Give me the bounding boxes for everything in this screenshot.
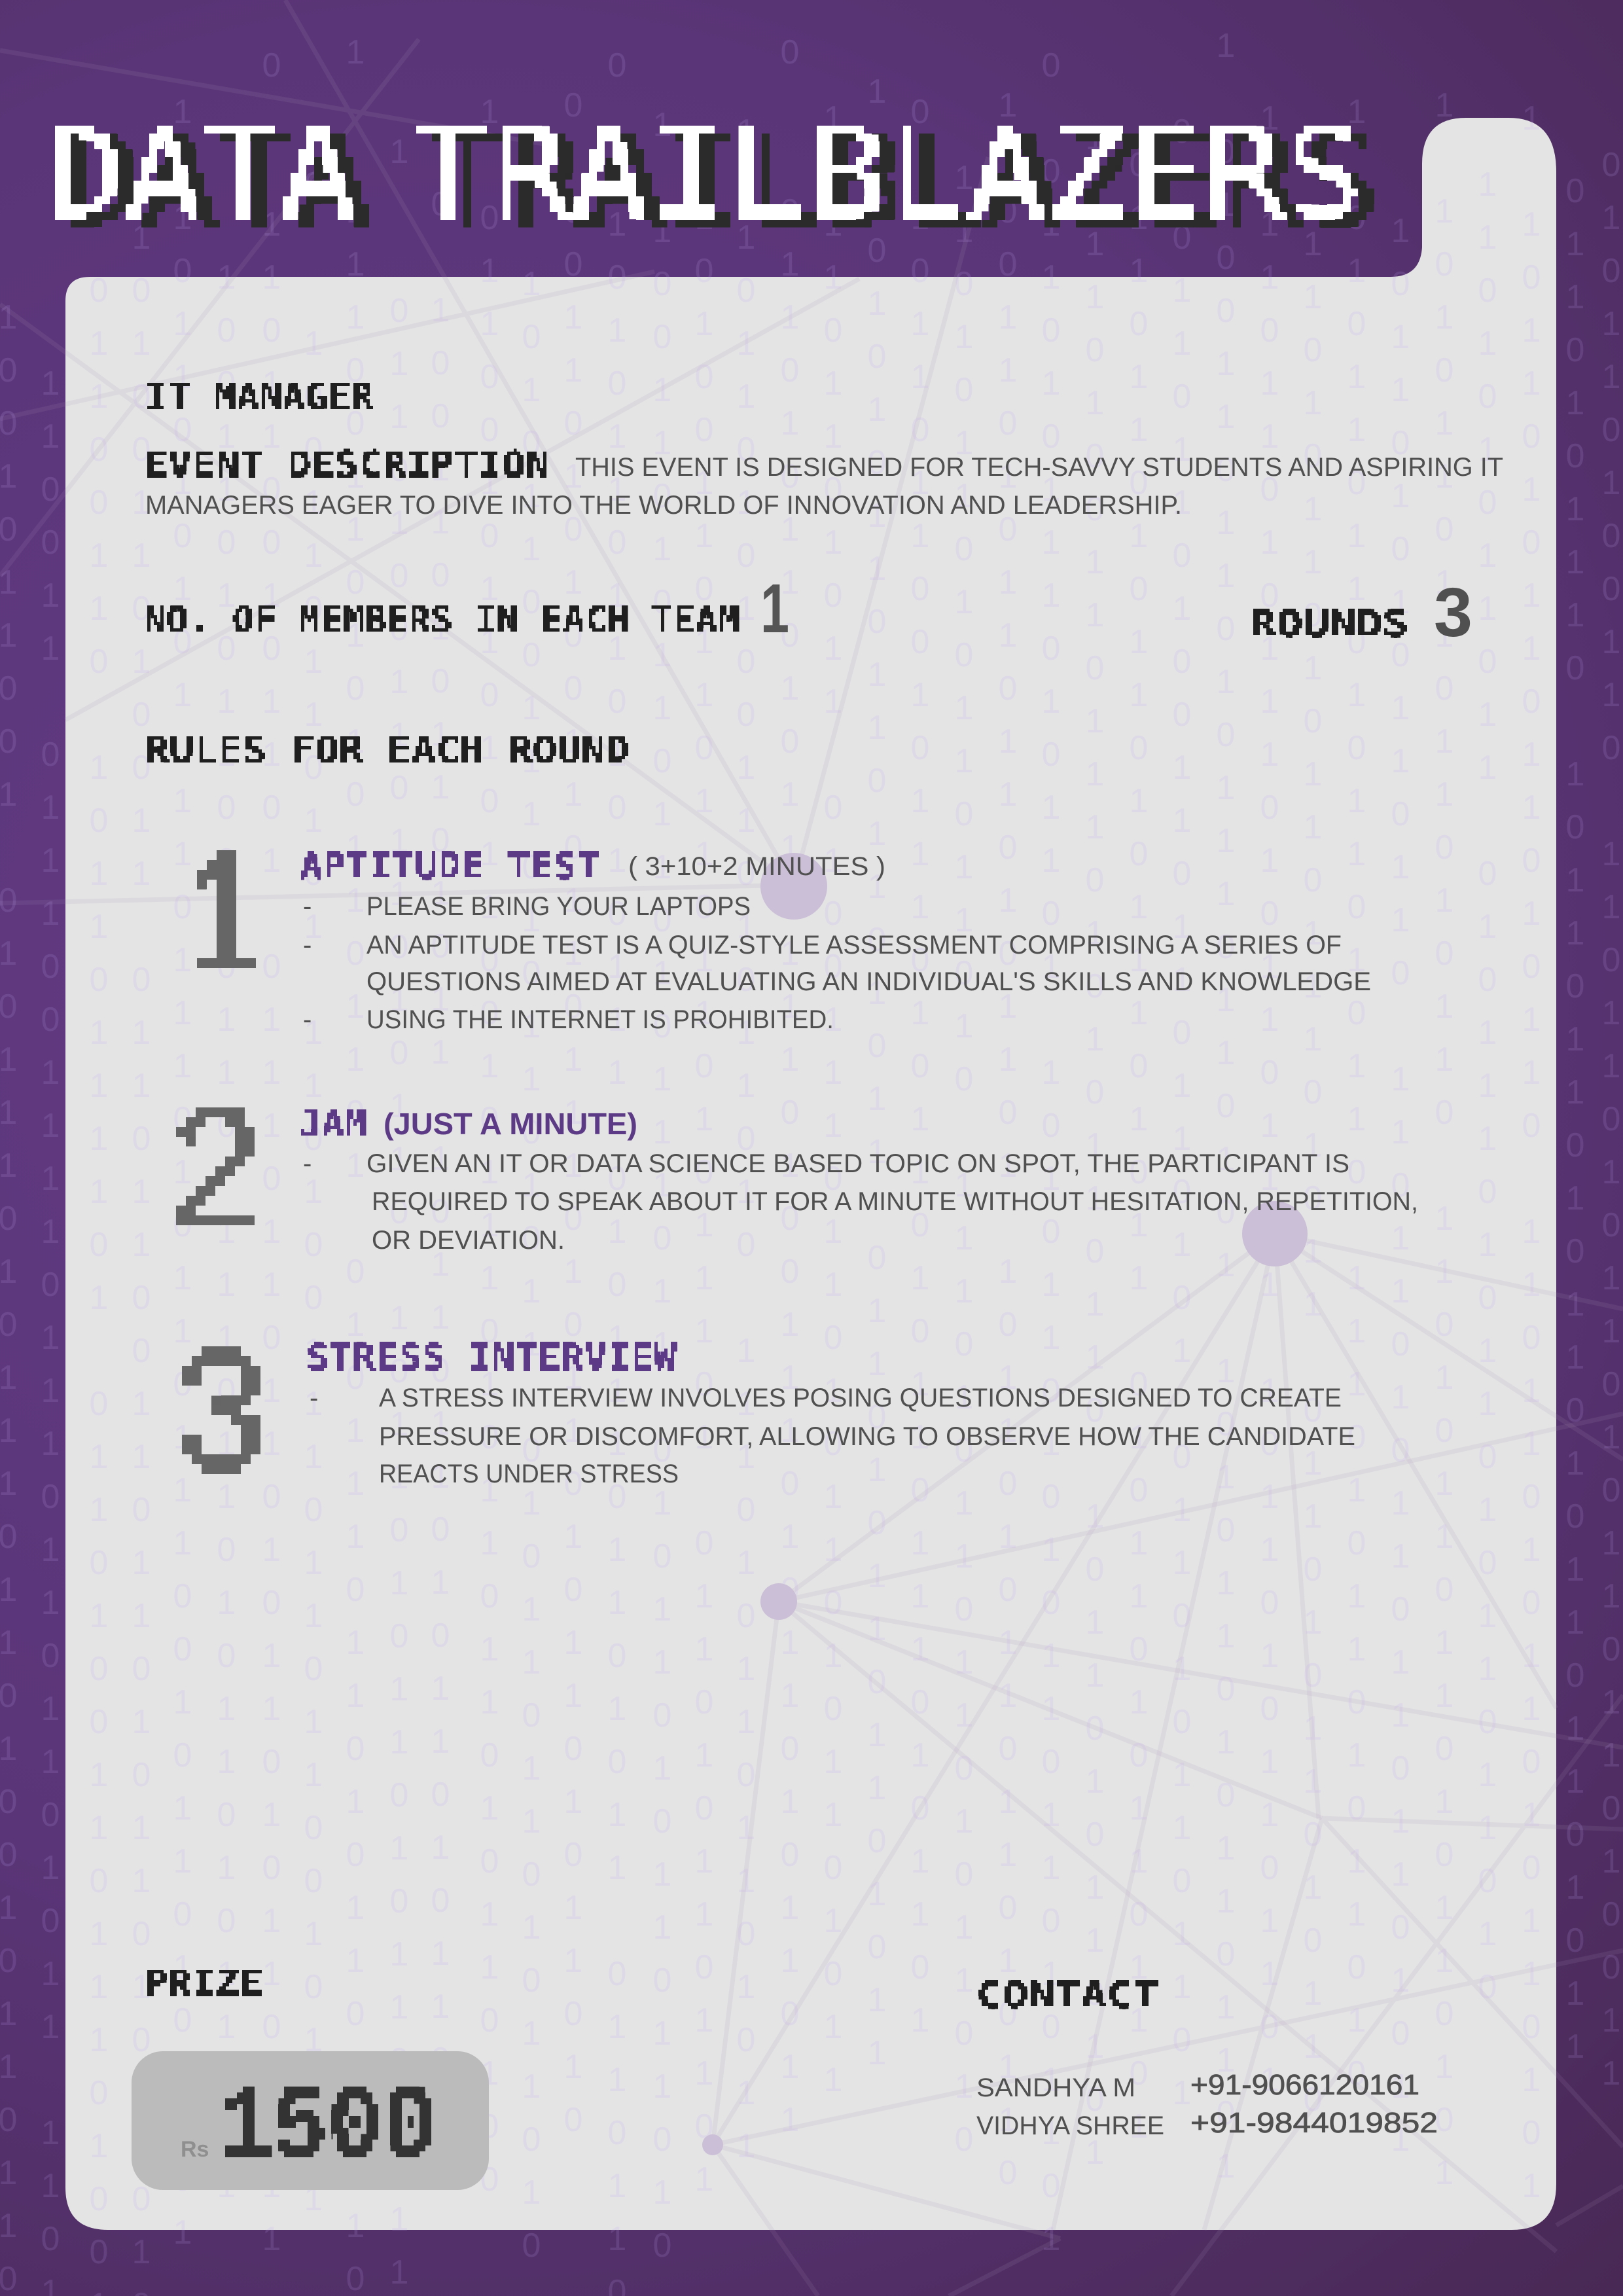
binary digits pattern: 1 0101101101011010110 1110101101011010 bbox=[1338, 0, 1376, 2108]
round 3 bbox=[306, 1336, 1355, 1488]
contact: +91-9066120161 bbox=[1190, 2069, 1419, 2101]
binary digits pattern: 110101101011011010 1110101101101011010 bbox=[945, 0, 983, 2174]
event description: MANAGERS EAGER TO DIVE INTO THE WORLD OF INNOVATION AND LEADERSHIP. bbox=[145, 491, 1182, 520]
team members bbox=[144, 570, 789, 647]
binary digits pattern: 0 100110101101011 10110110101101011010 bbox=[421, 26, 459, 2200]
binary digits pattern: 0 0110110100110110110101 0110101101101 bbox=[1163, 7, 1201, 2127]
prize box bbox=[132, 2051, 489, 2190]
binary digits pattern: 1 01100101101011001011101011011010110100 bbox=[471, 0, 508, 2214]
team members: NO. OF MEMBERS IN EACH TEAM bbox=[144, 599, 740, 641]
contact bbox=[976, 1974, 1438, 2140]
title: TRAILBLAZERS bbox=[411, 101, 1363, 246]
title bbox=[47, 101, 1380, 253]
binary digits pattern: 0 10110110010111010110101101110101101 bbox=[901, 0, 939, 2054]
title: DATA bbox=[64, 109, 373, 253]
rounds: ROUNDS bbox=[1250, 603, 1409, 645]
binary digits pattern: 1 10110101001101011010 1110101101101011 bbox=[727, 7, 765, 2180]
round 1: - bbox=[303, 1005, 312, 1034]
binary digits pattern: 0 1101100101101 0111011011010110101101011 bbox=[253, 0, 291, 2273]
binary digits pattern: 10011010110010110 1110110101101011011 bbox=[207, 0, 245, 2220]
binary digits pattern: 1010011010011 01101100110110101101011010 bbox=[122, 7, 160, 2296]
round 2: JAM bbox=[300, 1102, 366, 1145]
contact: CONTACT bbox=[976, 1974, 1159, 2017]
binary digits pattern: 1 011010011011010110 1011010110101101011 bbox=[380, 0, 418, 2296]
binary digits pattern: 0 100110110101 11010011101101100101101 bbox=[294, 7, 332, 2233]
binary digits pattern: 0 0110101110101101 10101101010110110101101 bbox=[1032, 0, 1070, 2273]
binary digits pattern: 1 101011001110101101011 0101101101011010 bbox=[512, 0, 550, 2280]
prize box: 1500 bbox=[219, 2068, 437, 2190]
contact: SANDHYA M bbox=[976, 2073, 1135, 2102]
binary digits pattern: 1 110110101110101101101 10110101101101 bbox=[1251, 0, 1289, 2114]
binary digits pattern: 1 1010101101101101011 0110101101101011 bbox=[858, 20, 896, 2087]
binary digits pattern: 110101101011011101011 01101011010110 bbox=[1294, 13, 1332, 2134]
binary digits pattern: 1 0100110110101110110101 1010110101101101 bbox=[1207, 0, 1245, 2200]
rounds: 3 bbox=[1434, 574, 1472, 651]
binary digits pattern: 0 110101101101010111 01011101101011 0110110 bbox=[598, 0, 636, 2296]
round 2: OR DEVIATION. bbox=[372, 1226, 565, 1255]
title: TRAILBLAZERS bbox=[428, 109, 1380, 253]
round 1: QUESTIONS AIMED AT EVALUATING AN INDIVIDUAL'S SKILLS AND KNOWLEDGE bbox=[366, 967, 1371, 996]
binary digits pattern: 1101001101101101101011101 0110101101101 bbox=[685, 0, 723, 2214]
round 1 number: 1 bbox=[186, 821, 258, 1022]
round 2: (JUST A MINUTE) bbox=[383, 1107, 637, 1141]
round 2: - bbox=[303, 1149, 312, 1178]
binary digits pattern: 0110110101101011101011 010110101101101 bbox=[1120, 0, 1158, 2161]
round 2 bbox=[300, 1102, 1418, 1255]
title: DATA bbox=[47, 101, 356, 246]
binary digits pattern: 0110101110 1011011010110101101101011 bbox=[1556, 13, 1594, 2081]
binary digits pattern: 110101011011 0101110101101011011010 bbox=[1469, 7, 1507, 2021]
event description: EVENT DESCRIPTION bbox=[144, 444, 550, 486]
round 3: A STRESS INTERVIEW INVOLVES POSING QUESTIONS DESIGNED TO CREATE bbox=[379, 1384, 1342, 1412]
round 2: GIVEN AN IT OR DATA SCIENCE BASED TOPIC ON SPOT, THE PARTICIPANT IS bbox=[366, 1149, 1349, 1178]
team members: 1 bbox=[760, 570, 789, 647]
round 3: - bbox=[310, 1384, 318, 1412]
prize box: Rs bbox=[181, 2137, 209, 2162]
binary digits pattern: 1 1001101011011010111011 0101101011011010 bbox=[643, 0, 681, 2280]
round 3: STRESS INTERVIEW bbox=[306, 1336, 677, 1379]
heading: rules: RULES FOR EACH ROUND bbox=[145, 729, 630, 772]
round 1: PLEASE BRING YOUR LAPTOPS bbox=[366, 892, 751, 921]
round 1: - bbox=[303, 931, 312, 960]
round 2 number: 2 bbox=[166, 1079, 264, 1279]
binary digits pattern: 1 101101011011010110 1101101011010110101 bbox=[1512, 0, 1550, 2220]
contact: +91-9844019852 bbox=[1190, 2107, 1438, 2139]
rounds bbox=[1250, 574, 1472, 651]
round 2: REQUIRED TO SPEAK ABOUT IT FOR A MINUTE WITHOUT HESITATION, REPETITION, bbox=[372, 1187, 1418, 1216]
binary digits pattern: 1 101011011011010110 1101011011010110101 bbox=[1425, 0, 1463, 2207]
binary digits pattern: 1 1101101011 0100111011010110101101011 bbox=[814, 0, 852, 2114]
round 1: USING THE INTERNET IS PROHIBITED. bbox=[366, 1005, 834, 1034]
network nodes bbox=[702, 853, 1308, 2155]
heading: IT Manager: IT MANAGER bbox=[145, 376, 374, 418]
round 3 number: 3 bbox=[172, 1321, 270, 1522]
round 1: - bbox=[303, 892, 312, 921]
round 1: APTITUDE TEST bbox=[300, 845, 599, 888]
event description bbox=[144, 444, 1503, 520]
round 1 bbox=[300, 845, 1371, 1034]
event description: THIS EVENT IS DESIGNED FOR TECH-SAVVY STUDENTS AND ASPIRING IT bbox=[575, 453, 1503, 482]
round 1: AN APTITUDE TEST IS A QUIZ-STYLE ASSESSMENT COMPRISING A SERIES OF bbox=[366, 931, 1342, 960]
binary digits pattern: 1 11010011011101010110110 1011010110101 bbox=[1076, 13, 1114, 2187]
binary digits pattern: 101101010110110 110110101101101101011 bbox=[1382, 0, 1419, 2174]
contact: VIDHYA SHREE bbox=[976, 2111, 1164, 2140]
binary digits pattern: 1 0011010110110101101 101101011011010110 bbox=[989, 0, 1027, 2207]
heading: prize: PRIZE bbox=[144, 1962, 263, 2005]
round 3: REACTS UNDER STRESS bbox=[379, 1460, 679, 1488]
round 1: ( 3+10+2 MINUTES ) bbox=[628, 852, 885, 881]
binary digits pattern: 0 0011010100110110111010110101101011010 bbox=[554, 0, 592, 2154]
binary digits pattern: 0 0110101101011011101001110101101011011 bbox=[771, 0, 809, 2154]
binary digits pattern: 1 1110011010101101101 01011101101011010110 bbox=[336, 0, 374, 2296]
round 3: PRESSURE OR DISCOMFORT, ALLOWING TO OBSERVE HOW THE CANDIDATE bbox=[379, 1422, 1355, 1451]
binary digits pattern: 1 1011010101 1101110101101110010110101101 bbox=[164, 0, 202, 2267]
